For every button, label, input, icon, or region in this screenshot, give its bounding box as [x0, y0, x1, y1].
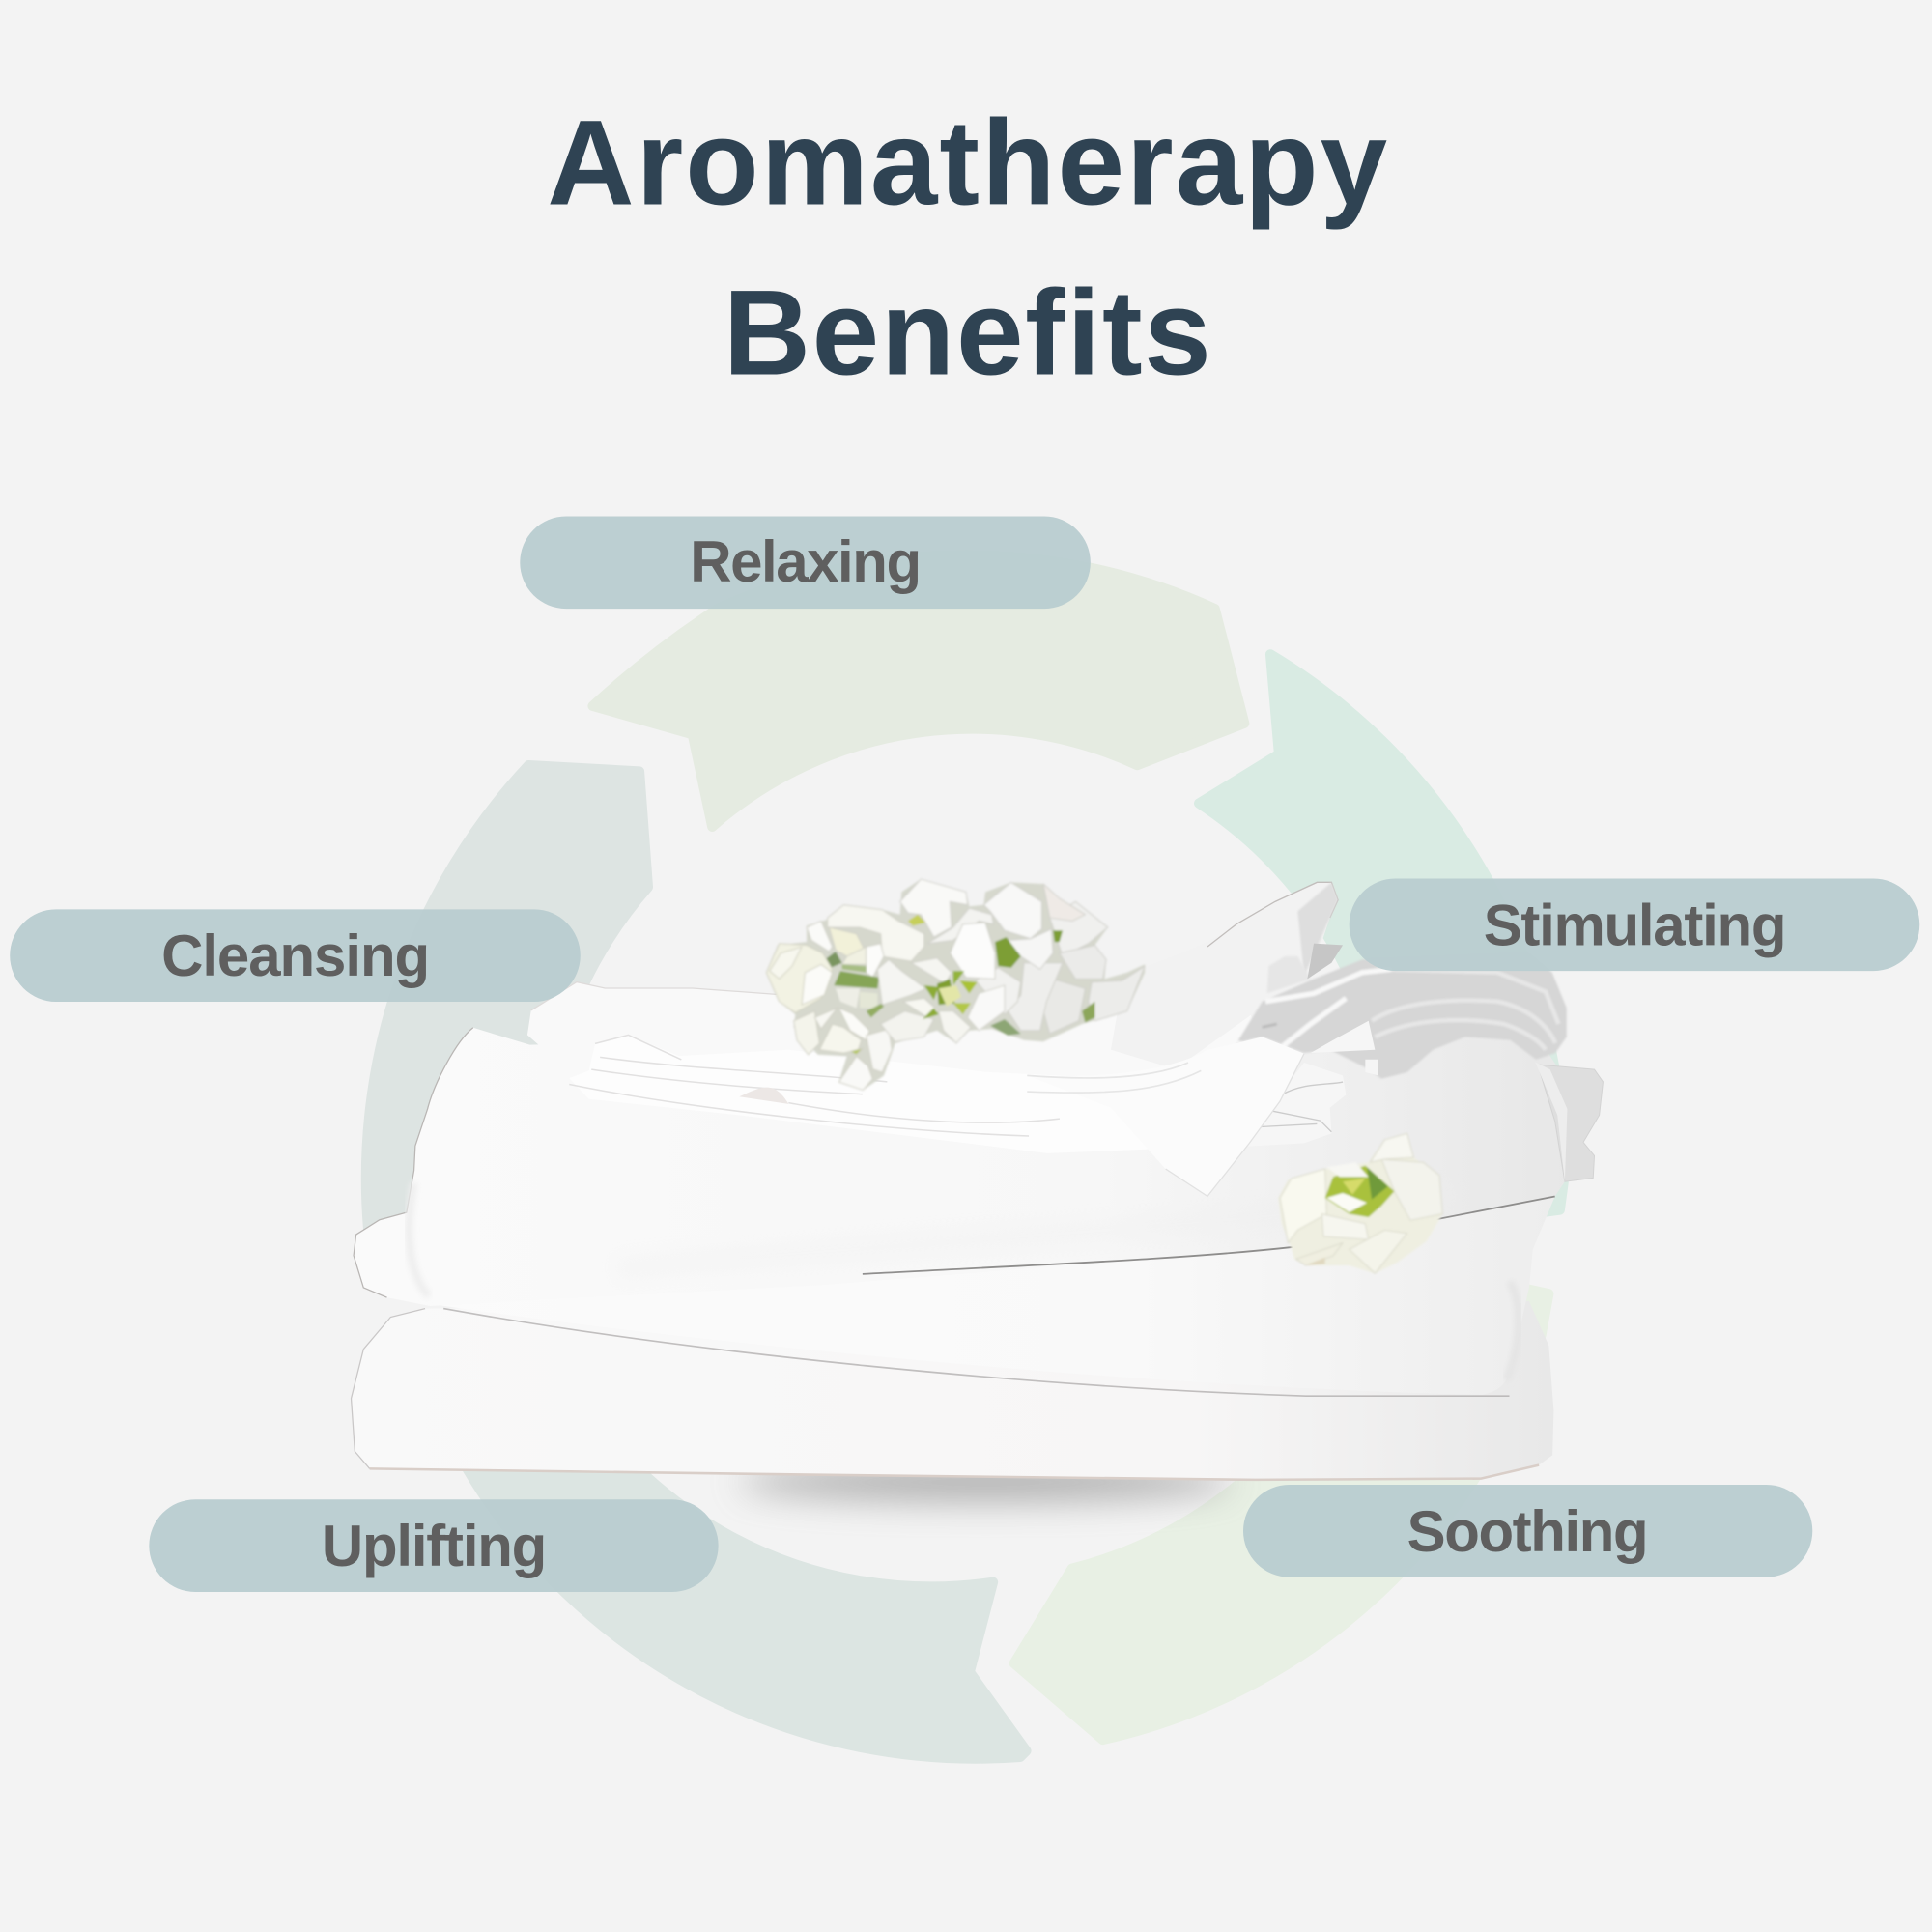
- shadow under towels: [739, 1463, 1233, 1501]
- label pill: Soothing: [1243, 1485, 1812, 1577]
- white cloth inset: [1311, 1021, 1375, 1053]
- bottom sheet: [352, 1301, 1553, 1480]
- draped sheet corner: [1027, 1037, 1304, 1196]
- petals: [1280, 1133, 1442, 1273]
- label pill: Relaxing: [520, 516, 1091, 609]
- top flower centre: [908, 915, 925, 925]
- raised flap behind flowers: [1111, 882, 1338, 1069]
- upper large folded sheet: [354, 1023, 1577, 1306]
- label pill: Relaxing: Relaxing: [690, 529, 922, 594]
- centre large flower: [877, 923, 1021, 1043]
- label pill: Cleansing: [10, 909, 581, 1002]
- arrow: right: [1199, 654, 1564, 1233]
- middle sheet: [387, 1197, 1555, 1395]
- small folded cloth at right: [1246, 1063, 1346, 1147]
- green centre: [1306, 1162, 1394, 1265]
- flowers on the right: [983, 882, 1145, 1034]
- label pill: Uplifting: [149, 1499, 719, 1592]
- label pill: Cleansing: Cleansing: [161, 923, 430, 988]
- single flower on towel: [1278, 1133, 1442, 1273]
- right side flap: [1538, 1065, 1603, 1181]
- fold on right of large sheet: [1535, 1062, 1567, 1181]
- lower flower: [794, 1008, 892, 1090]
- arrow: bottom left: [419, 1343, 1026, 1759]
- stem and bud: [823, 952, 884, 1017]
- green centres, right flowers: [995, 930, 1094, 1022]
- upper-left flower: [807, 905, 924, 978]
- title: [547, 97, 1387, 401]
- arrow: top: [593, 554, 1244, 827]
- top flower: [900, 879, 993, 944]
- cycle of five arrows: [366, 554, 1564, 1759]
- title: Aromatherapy: [547, 97, 1387, 231]
- towel stack illustration: [352, 879, 1603, 1501]
- label pill: Soothing: Soothing: [1407, 1499, 1649, 1564]
- title: Benefits: [724, 267, 1211, 401]
- cluster shaded silhouette: [766, 879, 1145, 1090]
- raised flap, ruffled stack and draped corner: [1027, 882, 1567, 1196]
- bud below cluster: [990, 1019, 1021, 1036]
- arrow: left: [366, 765, 648, 1244]
- arrow: bottom right: [1014, 1257, 1548, 1740]
- flower cluster: [766, 879, 1145, 1090]
- ruffled grey stack: [1236, 953, 1567, 1079]
- label pill: Stimulating: [1350, 878, 1919, 971]
- flower base: [1278, 1133, 1442, 1273]
- left flower: [766, 944, 833, 1012]
- dark under-fold: [1307, 944, 1343, 979]
- centre large flower, green star: [923, 971, 978, 1019]
- top flat sheet: [527, 974, 1282, 1096]
- label pill: Stimulating: Stimulating: [1484, 893, 1786, 957]
- label pill: Uplifting: Uplifting: [322, 1514, 547, 1578]
- layered cloth under flowers: [569, 1035, 1233, 1153]
